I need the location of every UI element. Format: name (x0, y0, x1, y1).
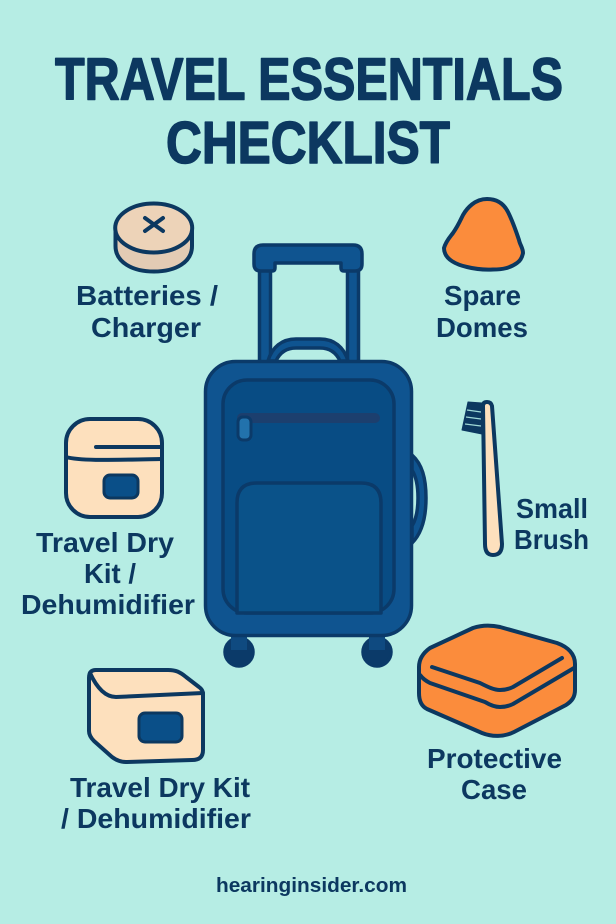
label: Spare Domes (436, 280, 528, 343)
label: Travel Dry Kit / Dehumidifier (21, 527, 195, 620)
label: Travel Dry Kit / Dehumidifier (second): Travel Dry Kit (70, 772, 250, 803)
label: Travel Dry Kit / Dehumidifier: Travel Dry (36, 527, 174, 558)
title (55, 46, 563, 176)
suitcase top handle (254, 245, 362, 271)
icon: battery (115, 204, 192, 272)
label: Travel Dry Kit / Dehumidifier (second) (61, 772, 251, 834)
icon: travel dry kit box (89, 670, 203, 762)
label: Spare Domes: Domes (436, 312, 528, 343)
label: Batteries / Charger: Charger (91, 312, 201, 343)
icon: travel dry kit jar (66, 419, 162, 517)
brush bristles (462, 402, 482, 434)
icon: spare dome (444, 199, 523, 270)
label: Protective Case: Protective (427, 743, 562, 774)
suitcase zipper pull (238, 417, 251, 440)
icon: suitcase (206, 245, 426, 666)
jar window (104, 475, 138, 498)
suitcase telescopic poles (260, 268, 358, 362)
suitcase carry handle (268, 339, 348, 361)
suitcase wheels (225, 636, 391, 666)
label: Small Brush: Brush (514, 524, 589, 555)
suitcase front pocket (237, 483, 381, 613)
suitcase zipper (238, 414, 379, 422)
suitcase main panel (223, 380, 394, 613)
suitcase side handle (412, 455, 426, 543)
title: CHECKLIST (166, 110, 450, 176)
label: Travel Dry Kit / Dehumidifier (second): / Dehumidifier (61, 803, 251, 834)
label: Protective Case (427, 743, 562, 805)
label: Travel Dry Kit / Dehumidifier: Dehumidifier (21, 589, 195, 620)
label: Small Brush: Small (516, 493, 588, 524)
label: Small Brush (514, 493, 589, 555)
icon: small brush (462, 402, 502, 555)
box window (139, 713, 182, 742)
footer website: hearinginsider.com (216, 874, 407, 897)
icon: protective case (419, 626, 575, 736)
label: Batteries / Charger (76, 280, 218, 343)
label: Spare Domes: Spare (444, 280, 521, 311)
label: Protective Case: Case (461, 774, 527, 805)
label: Batteries / Charger: Batteries / (76, 280, 218, 311)
brush handle (483, 402, 502, 555)
label: Travel Dry Kit / Dehumidifier: Kit / (84, 558, 136, 589)
suitcase body (206, 362, 412, 636)
